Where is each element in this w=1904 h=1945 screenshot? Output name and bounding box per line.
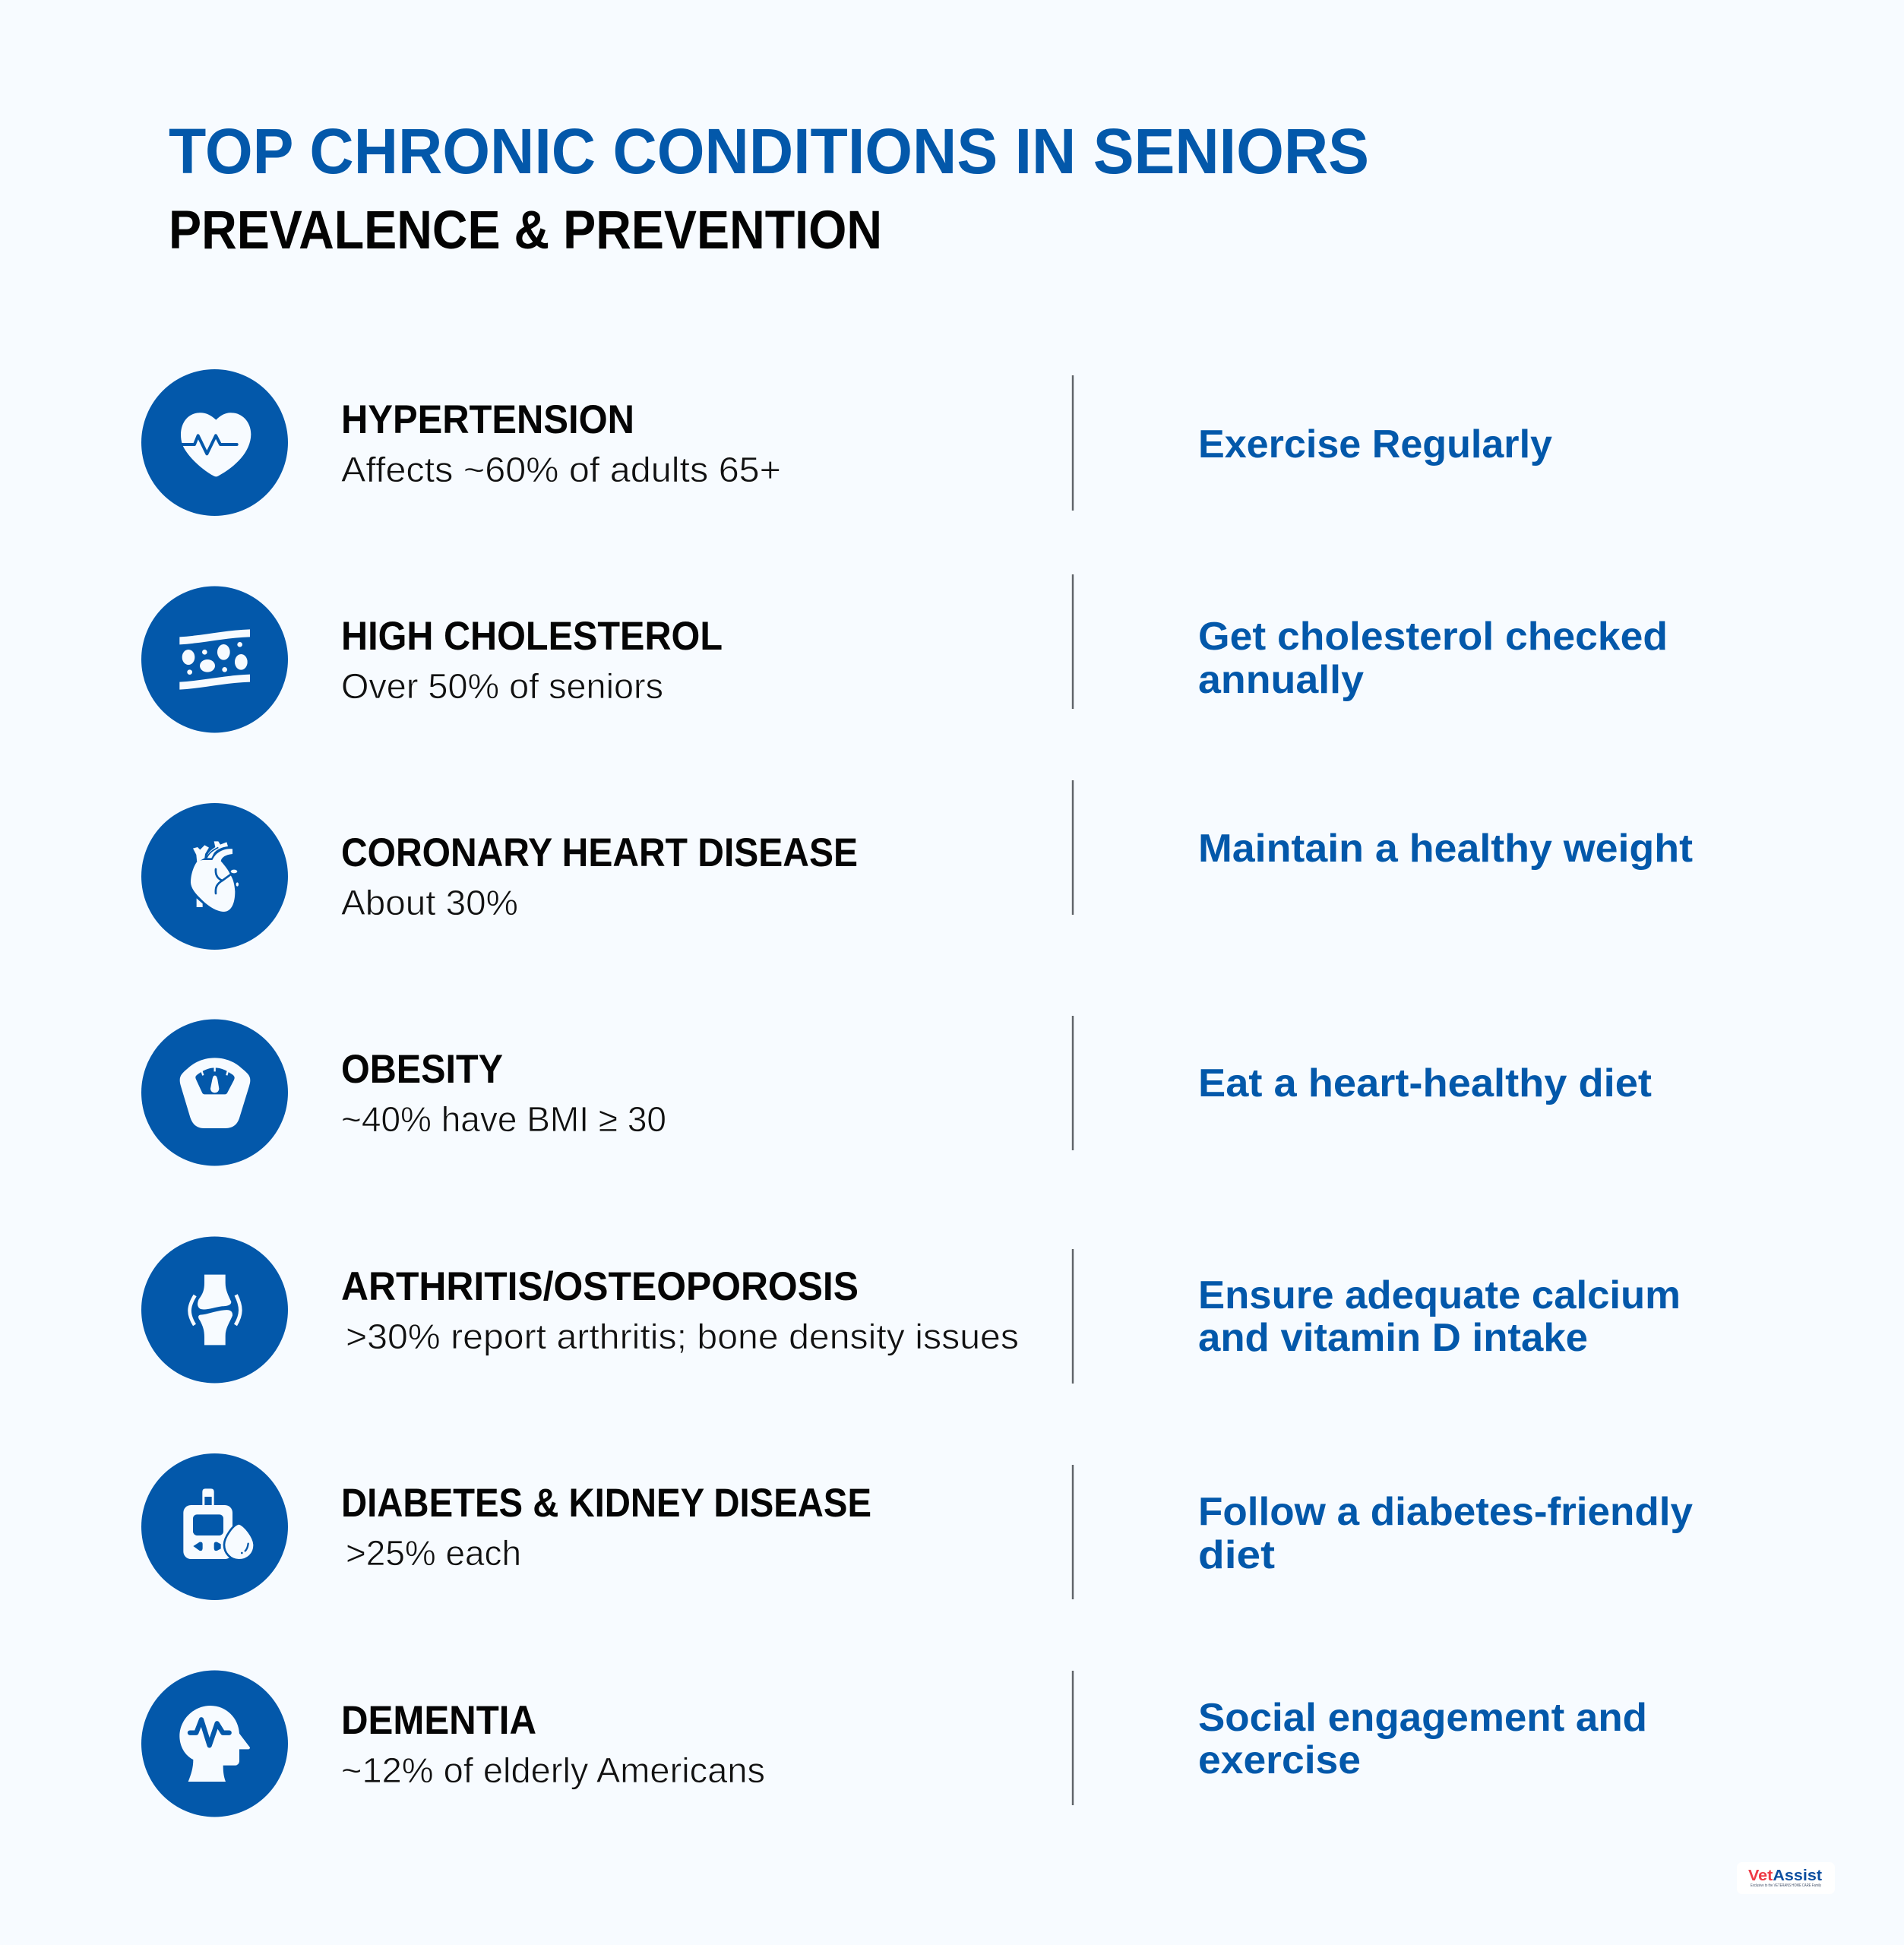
logo: VetAssist: VetAssist — [1748, 1868, 1822, 1884]
condition name: OBESITY — [341, 1047, 503, 1092]
prevention tip: and vitamin D intake — [1198, 1316, 1588, 1360]
row: high cholesterol — [141, 574, 1668, 732]
row: arthritis / osteoporosis — [141, 1237, 1681, 1384]
condition name: HIGH CHOLESTEROL — [341, 614, 723, 659]
divider — [1072, 1671, 1074, 1805]
condition name: CORONARY HEART DISEASE — [341, 830, 858, 875]
row: coronary heart disease — [141, 780, 1693, 950]
divider — [1072, 1016, 1074, 1150]
prevalence: ~12% of elderly Americans — [341, 1750, 765, 1790]
row: obesity — [141, 1016, 1652, 1165]
prevention tip: Follow a diabetes-friendly — [1198, 1490, 1693, 1534]
divider — [1072, 375, 1074, 511]
prevention tip: annually — [1198, 658, 1364, 702]
row: diabetes and kidney disease — [141, 1453, 1693, 1600]
icon: anatomical heart — [141, 803, 288, 950]
prevalence: >30% report arthritis; bone density issues — [346, 1317, 1019, 1356]
divider — [1072, 780, 1074, 915]
prevention tip: Exercise Regularly — [1198, 422, 1552, 466]
prevention tip: Maintain a healthy weight — [1198, 827, 1693, 871]
prevalence: About 30% — [341, 883, 518, 922]
prevention tip: exercise — [1198, 1738, 1361, 1782]
prevention tip: Eat a heart-healthy diet — [1198, 1061, 1652, 1105]
logo: VetAssist: Exclusive to the VETERANS HOME CARE Family — [1751, 1883, 1821, 1888]
logo: VetAssist — [1737, 1862, 1835, 1894]
prevalence: Affects ~60% of adults 65+ — [341, 450, 781, 489]
condition name: HYPERTENSION — [341, 397, 634, 442]
row: hypertension — [141, 369, 1552, 516]
prevention tip: diet — [1198, 1533, 1275, 1577]
prevalence: ~40% have BMI ≥ 30 — [341, 1099, 666, 1139]
divider — [1072, 1249, 1074, 1384]
title: TOP CHRONIC CONDITIONS IN SENIORS — [169, 115, 1369, 187]
prevention tip: Ensure adequate calcium — [1198, 1273, 1681, 1317]
prevention tip: Social engagement and — [1198, 1696, 1647, 1740]
condition name: ARTHRITIS/OSTEOPOROSIS — [341, 1264, 859, 1309]
divider — [1072, 574, 1074, 709]
divider — [1072, 1465, 1074, 1599]
icon: glucose meter and blood drop — [141, 1453, 288, 1600]
icon: head with brain activity — [141, 1670, 288, 1817]
subtitle: PREVALENCE & PREVENTION — [169, 201, 882, 261]
condition name: DEMENTIA — [341, 1698, 536, 1743]
prevalence: >25% each — [346, 1533, 521, 1573]
condition name: DIABETES & KIDNEY DISEASE — [341, 1481, 871, 1526]
icon: weighing scale — [141, 1020, 288, 1165]
icon: artery with plaque — [141, 587, 288, 732]
icon: heart with pulse — [141, 369, 288, 516]
prevalence: Over 50% of seniors — [341, 666, 663, 706]
icon: knee joint — [141, 1237, 288, 1383]
prevention tip: Get cholesterol checked — [1198, 615, 1668, 659]
row: dementia — [141, 1670, 1647, 1817]
